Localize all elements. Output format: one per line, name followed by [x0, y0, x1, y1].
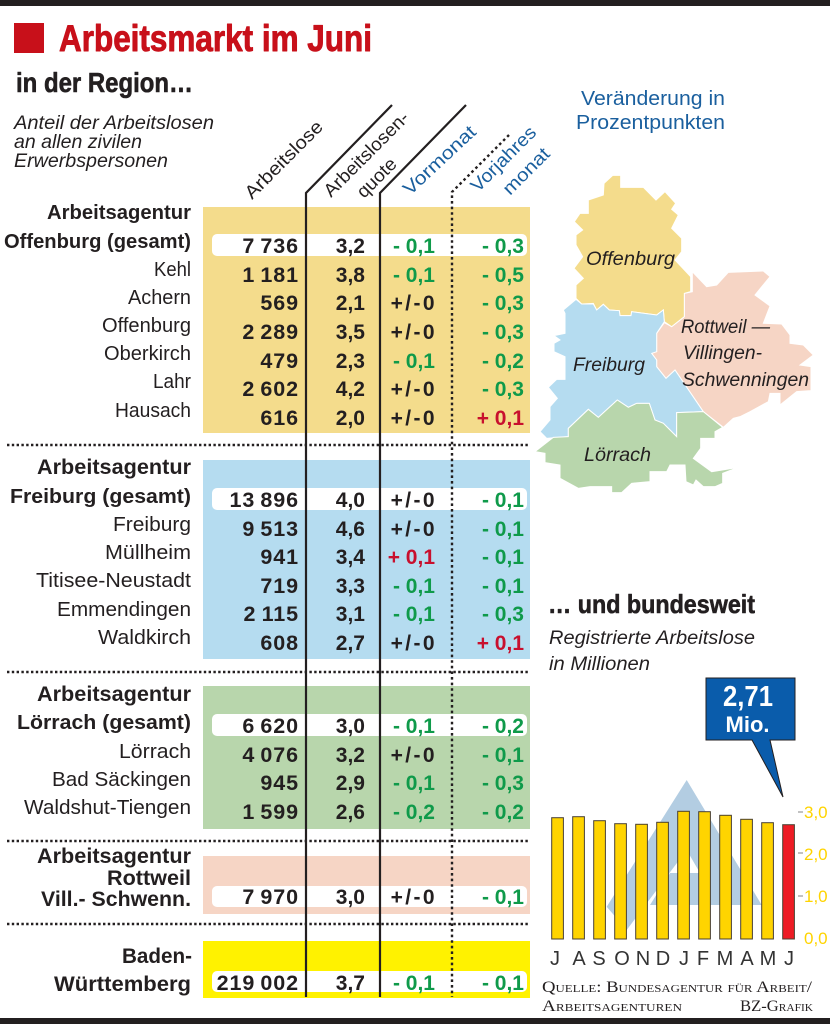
row: Oberkirch: - 0,1	[393, 350, 435, 373]
row: Lörrach gesamt: 3,0	[336, 715, 365, 738]
row: Müllheim: Müllheim	[105, 542, 191, 564]
logo watermark	[607, 780, 762, 930]
row: Offenburg: 3,5	[336, 321, 365, 344]
note: Anteil der Arbeitslosen: an allen zivilen	[14, 132, 142, 153]
row: Bad Säckingen: 2,9	[336, 772, 365, 795]
column headers: quote	[352, 153, 401, 202]
row: Achern: Achern	[128, 287, 191, 309]
y axis	[798, 803, 828, 948]
row: Lahr: +/-0	[391, 378, 437, 401]
row: Offenburg gesamt: 3,2	[336, 235, 365, 258]
row: Offenburg gesamt: 7 736	[242, 234, 299, 258]
map labels	[573, 249, 809, 466]
column headers	[240, 107, 554, 203]
row: Freiburg: 4,6	[336, 518, 365, 541]
row: Offenburg: Offenburg	[102, 315, 191, 337]
row: Titisee-Neustadt: - 0,1	[482, 575, 524, 598]
month labels	[550, 948, 794, 970]
row: Lörrach gesamt	[242, 714, 524, 738]
callout: 2,71 Mio.: Mio.	[726, 712, 770, 737]
row: Kehl: 1 181	[242, 263, 299, 287]
row: Freiburg gesamt: +/-0	[391, 489, 437, 512]
row: Hausach	[115, 400, 524, 430]
month labels: F	[697, 948, 709, 970]
row: Titisee-Neustadt	[36, 570, 524, 598]
source: BZ-Grafik	[740, 998, 813, 1015]
row: Freiburg gesamt: - 0,1	[482, 489, 524, 512]
row: Offenburg	[102, 315, 524, 344]
row: Freiburg gesamt: 13 896	[230, 488, 299, 512]
row: Hausach: + 0,1	[477, 407, 524, 430]
row: Offenburg gesamt: - 0,3	[482, 235, 524, 258]
month labels: J	[784, 948, 794, 970]
row: Lörrach	[119, 741, 524, 767]
row: Achern: 2,1	[336, 292, 365, 315]
label: Arbeitsagentur Rottweil: Arbeitsagentur	[37, 844, 192, 868]
panel: Lörrach	[17, 682, 530, 829]
map region: Freiburg	[540, 299, 703, 438]
y axis: 3,0	[804, 803, 828, 822]
row: Bad Säckingen: - 0,1	[393, 772, 435, 795]
source: Quelle: Bundesagentur für Arbeit/	[542, 979, 813, 996]
title: Arbeitsmarkt im Juni	[59, 18, 372, 59]
row: Baden-Württemberg: - 0,1	[393, 972, 435, 995]
row: Achern	[128, 287, 524, 315]
month labels: N	[636, 948, 650, 970]
row: Achern: +/-0	[391, 292, 437, 315]
row: Bad Säckingen	[52, 769, 524, 795]
bar chart	[550, 803, 828, 970]
row: Waldkirch: 608	[260, 631, 299, 655]
label: Arbeitsagentur Freiburg: Arbeitsagentur	[37, 455, 192, 479]
note: Anteil der Arbeitslosen: Anteil der Arbeitslosen	[13, 113, 214, 134]
row: Oberkirch: 479	[260, 349, 299, 373]
row: Hausach: +/-0	[391, 407, 437, 430]
row: Hausach: 2,0	[336, 407, 365, 430]
label: Arbeitsagentur Offenburg: Arbeitsagentur	[47, 202, 191, 224]
row: Lahr: 2 602	[242, 377, 299, 401]
map labels: Lörrach	[584, 445, 651, 466]
row: Rottweil: +/-0	[391, 886, 437, 909]
month labels: A	[740, 948, 754, 970]
bottom bar	[0, 1018, 830, 1024]
label: Arbeitsagentur Freiburg: Freiburg (gesamt)	[10, 486, 191, 508]
row: Oberkirch: - 0,2	[482, 350, 524, 373]
row: Achern: 569	[260, 291, 299, 315]
row: Kehl: 3,8	[336, 264, 365, 287]
row: Lörrach gesamt: 6 620	[242, 714, 299, 738]
y axis: 0,0	[804, 929, 828, 948]
row: Freiburg	[113, 514, 524, 541]
row: Rottweil: 3,0	[336, 886, 365, 909]
heading: in der Region: in der Region…	[16, 67, 193, 98]
top bar	[0, 0, 830, 6]
label: Baden-Württemberg: Baden-	[122, 944, 192, 968]
note: Registrierte Arbeitslose	[549, 628, 755, 675]
label: Arbeitsagentur Lörrach	[17, 682, 192, 734]
row: Freiburg: Freiburg	[113, 514, 191, 536]
row: Kehl: Kehl	[154, 259, 191, 281]
month labels: O	[614, 948, 630, 970]
month labels: J	[679, 948, 689, 970]
y axis: 2,0	[804, 845, 828, 864]
row: Müllheim: 941	[260, 545, 299, 569]
label: Arbeitsagentur Freiburg	[10, 455, 192, 508]
column headers: monat	[498, 143, 554, 199]
label: Arbeitsagentur Offenburg	[4, 202, 191, 253]
month labels: S	[592, 948, 606, 970]
row: Lörrach: - 0,1	[482, 744, 524, 767]
map labels: Villingen-	[683, 343, 762, 364]
map labels: Freiburg	[573, 355, 645, 376]
column headers: Vormonat	[398, 121, 480, 199]
row: Oberkirch: 2,3	[336, 350, 365, 373]
panel: Baden-Württemberg	[54, 941, 530, 998]
row: Lahr: Lahr	[153, 371, 191, 393]
row: Offenburg gesamt	[242, 234, 524, 258]
map region: Rottweil	[652, 271, 813, 427]
row: Oberkirch	[104, 343, 524, 373]
row: Freiburg gesamt: 4,0	[336, 489, 365, 512]
row: Müllheim: 3,4	[336, 546, 365, 569]
row: Hausach: Hausach	[115, 400, 191, 422]
row: Offenburg: - 0,3	[482, 321, 524, 344]
row: Waldshut-Tiengen	[24, 797, 524, 824]
row: Freiburg: +/-0	[391, 518, 437, 541]
row: Emmendingen: Emmendingen	[57, 599, 191, 621]
label: Baden-Württemberg: Württemberg	[54, 972, 191, 996]
map region: Offenburg	[574, 175, 691, 327]
column headers: Arbeitslosen-	[319, 107, 413, 201]
row: Kehl	[154, 259, 524, 287]
row: Lahr: - 0,3	[482, 378, 524, 401]
label: Arbeitsagentur Rottweil: Vill.- Schwenn.	[41, 887, 191, 911]
row: Offenburg: +/-0	[391, 321, 437, 344]
month labels: J	[550, 948, 560, 970]
row: Waldshut-Tiengen: - 0,2	[482, 801, 524, 824]
row: Lörrach gesamt: - 0,2	[482, 715, 524, 738]
row: Emmendingen: - 0,3	[482, 603, 524, 626]
map region: Lörrach	[535, 400, 738, 493]
month labels: M	[760, 948, 776, 970]
map labels: Offenburg	[586, 249, 675, 270]
panel: Freiburg	[10, 455, 530, 659]
label: Baden-Württemberg	[54, 944, 192, 996]
month labels: M	[717, 948, 733, 970]
row: Titisee-Neustadt: 3,3	[336, 575, 365, 598]
row: Waldkirch: + 0,1	[477, 632, 524, 655]
row: Offenburg gesamt: - 0,1	[393, 235, 435, 258]
text: Veränderung in Prozentpunkten: Prozentpunkten	[576, 112, 725, 134]
callout: 2,71 Mio.	[706, 678, 795, 797]
row: Kehl: - 0,5	[482, 264, 524, 287]
column divider lines	[306, 105, 509, 997]
row: Lahr: 4,2	[336, 378, 365, 401]
column headers: Vorjahres	[466, 122, 540, 196]
row: Kehl: - 0,1	[393, 264, 435, 287]
row: Rottweil: 7 970	[242, 885, 299, 909]
source	[542, 979, 813, 1015]
y axis: 1,0	[804, 887, 828, 906]
row: Lörrach: +/-0	[391, 744, 437, 767]
month labels: A	[572, 948, 586, 970]
label: Arbeitsagentur Lörrach: Lörrach (gesamt)	[17, 712, 191, 734]
row: Offenburg: 2 289	[242, 320, 299, 344]
row: Lörrach: 4 076	[242, 743, 299, 767]
row: Titisee-Neustadt: Titisee-Neustadt	[36, 570, 191, 592]
row: Bad Säckingen: - 0,3	[482, 772, 524, 795]
row: Waldkirch: 2,7	[336, 632, 365, 655]
row: Waldshut-Tiengen: Waldshut-Tiengen	[24, 797, 191, 819]
row: Lörrach: 3,2	[336, 744, 365, 767]
column headers: Arbeitslose	[240, 116, 327, 203]
row: Hausach: 616	[260, 406, 299, 430]
row: Baden-Württemberg: - 0,1	[482, 972, 524, 995]
text: Veränderung in Prozentpunkten: Veränderung in	[581, 88, 725, 110]
row: Lörrach gesamt: - 0,1	[393, 715, 435, 738]
row: Baden-Württemberg: 219 002	[217, 971, 299, 995]
row: Waldshut-Tiengen: 1 599	[242, 800, 299, 824]
note: Registrierte Arbeitslose: in Millionen	[549, 654, 650, 675]
row: Waldkirch: Waldkirch	[98, 627, 191, 649]
row: Freiburg: 9 513	[242, 517, 299, 541]
row: Waldshut-Tiengen: - 0,2	[393, 801, 435, 824]
month labels: D	[656, 948, 670, 970]
map: regions	[535, 175, 813, 493]
row: Oberkirch: Oberkirch	[104, 343, 191, 365]
row: Baden-Württemberg	[217, 971, 524, 995]
label: Arbeitsagentur Rottweil: Rottweil	[107, 866, 191, 890]
row: Bad Säckingen: 945	[260, 771, 299, 795]
row: Baden-Württemberg: 3,7	[336, 972, 365, 995]
row: Müllheim: + 0,1	[388, 546, 435, 569]
note: Registrierte Arbeitslose: Registrierte Arbeitslose	[549, 628, 755, 649]
row: Emmendingen	[57, 599, 524, 626]
row: Titisee-Neustadt: - 0,1	[393, 575, 435, 598]
heading: und bundesweit: … und bundesweit	[548, 589, 755, 619]
label: Arbeitsagentur Lörrach: Arbeitsagentur	[37, 682, 192, 706]
row: Freiburg gesamt	[230, 488, 524, 512]
row: Bad Säckingen: Bad Säckingen	[52, 769, 191, 791]
row: Achern: - 0,3	[482, 292, 524, 315]
label: Arbeitsagentur Offenburg: Offenburg (gesamt)	[4, 231, 191, 253]
row: Lahr	[153, 371, 524, 401]
note: Anteil der Arbeitslosen: Erwerbspersonen	[14, 151, 168, 172]
row: Rottweil: - 0,1	[482, 886, 524, 909]
label: Arbeitsagentur Rottweil	[37, 844, 192, 911]
row: Emmendingen: - 0,1	[393, 603, 435, 626]
source: Arbeitsagenturen	[542, 998, 682, 1015]
map labels: Rottweil —	[681, 317, 771, 338]
note: Anteil der Arbeitslosen	[13, 113, 214, 172]
text: Veränderung in Prozentpunkten	[576, 88, 725, 134]
row: Lörrach: Lörrach	[119, 741, 191, 763]
callout: 2,71 Mio.: 2,71	[723, 681, 773, 713]
row: Freiburg: - 0,1	[482, 518, 524, 541]
row: Waldkirch: +/-0	[391, 632, 437, 655]
row: Waldkirch	[98, 627, 524, 655]
panel: Rottweil	[37, 844, 530, 914]
row: Emmendingen: 2 115	[244, 602, 299, 626]
panel: Offenburg	[4, 202, 530, 433]
row: Rottweil	[242, 885, 524, 909]
row: Müllheim: - 0,1	[482, 546, 524, 569]
row: Müllheim	[105, 542, 524, 569]
map labels: Schwenningen	[682, 370, 809, 391]
row: Waldshut-Tiengen: 2,6	[336, 801, 365, 824]
row: Titisee-Neustadt: 719	[260, 574, 299, 598]
row: Emmendingen: 3,1	[336, 603, 365, 626]
